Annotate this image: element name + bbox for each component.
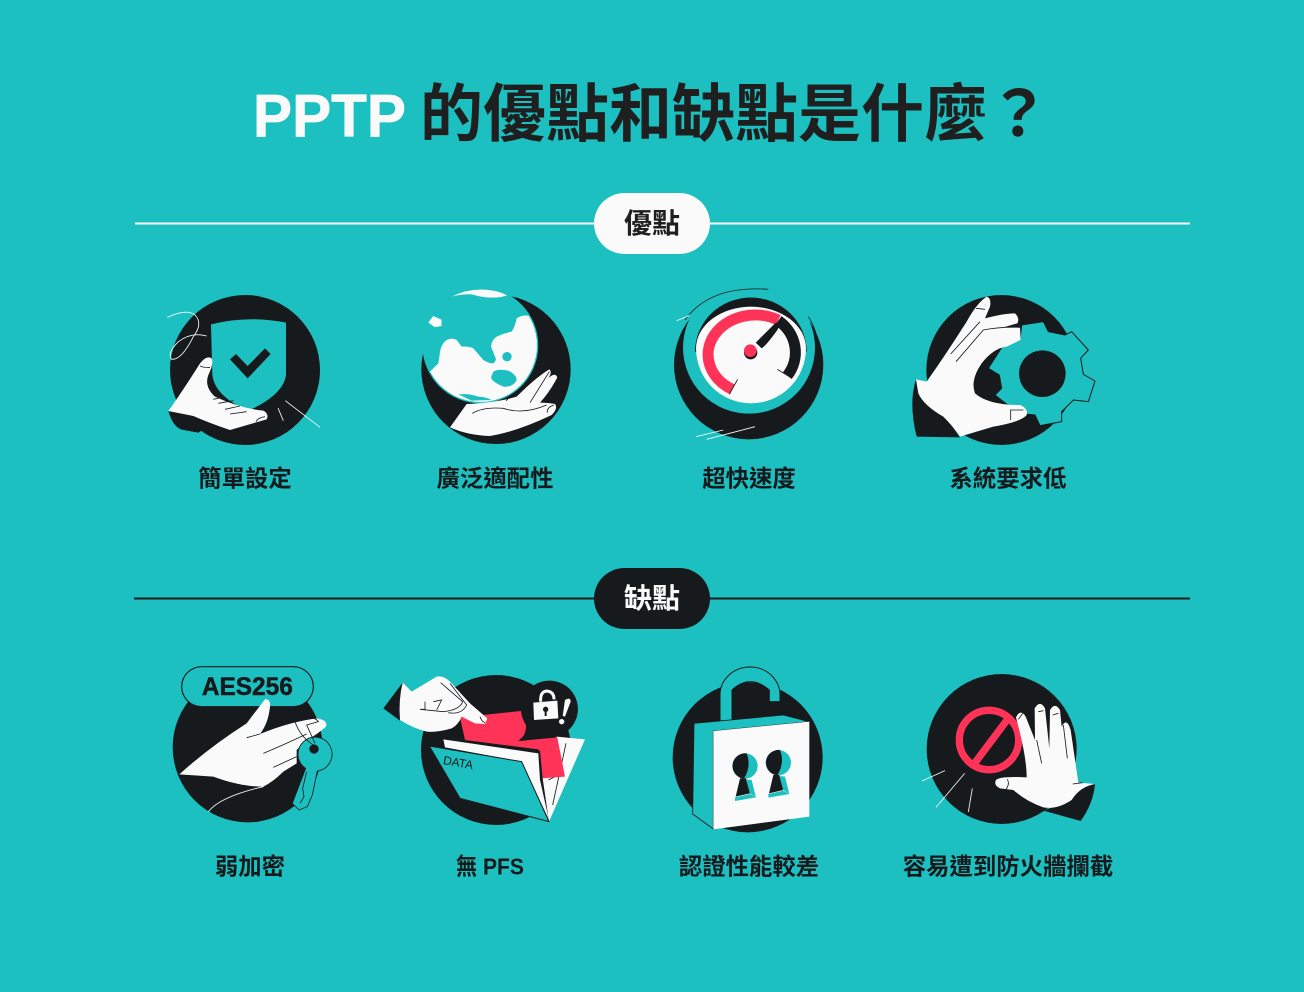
label: weaker authentication: 認證性能較差 [679,854,819,880]
section header: cons [134,568,1190,629]
title: PPTP [253,82,406,150]
title: 的優點和缺點是什麼？ [420,80,1050,150]
icon: AES256 hand and key [173,667,332,822]
section header: cons: 缺點 [624,583,680,614]
label: very fast speed: 超快速度 [702,466,796,492]
label: easily blocked by firewalls: 容易遭到防火牆攔截 [903,854,1113,880]
label: simple setup: 簡單設定 [198,466,292,492]
icon: folder, hand and open lock: DATA [442,753,474,772]
section header: pros [135,193,1190,254]
icon: hand holding gear [912,295,1095,445]
icon: AES256 hand and key: AES256 [202,673,293,701]
icon: speedometer [674,282,823,439]
label: no PFS: 無 PFS [456,852,524,880]
icon: hand with prohibition sign [922,674,1095,824]
label: low system requirements: 系統要求低 [950,466,1066,492]
label: wide compatibility: 廣泛適配性 [437,464,553,492]
section header: pros: 優點 [624,208,680,239]
label: weak encryption: 弱加密 [215,852,285,880]
icon: folder, hand and open lock [383,675,585,825]
icon: padlock with two keyholes [673,667,823,832]
icon: hand holding shield [167,295,320,445]
icon: hand holding globe [417,287,571,444]
